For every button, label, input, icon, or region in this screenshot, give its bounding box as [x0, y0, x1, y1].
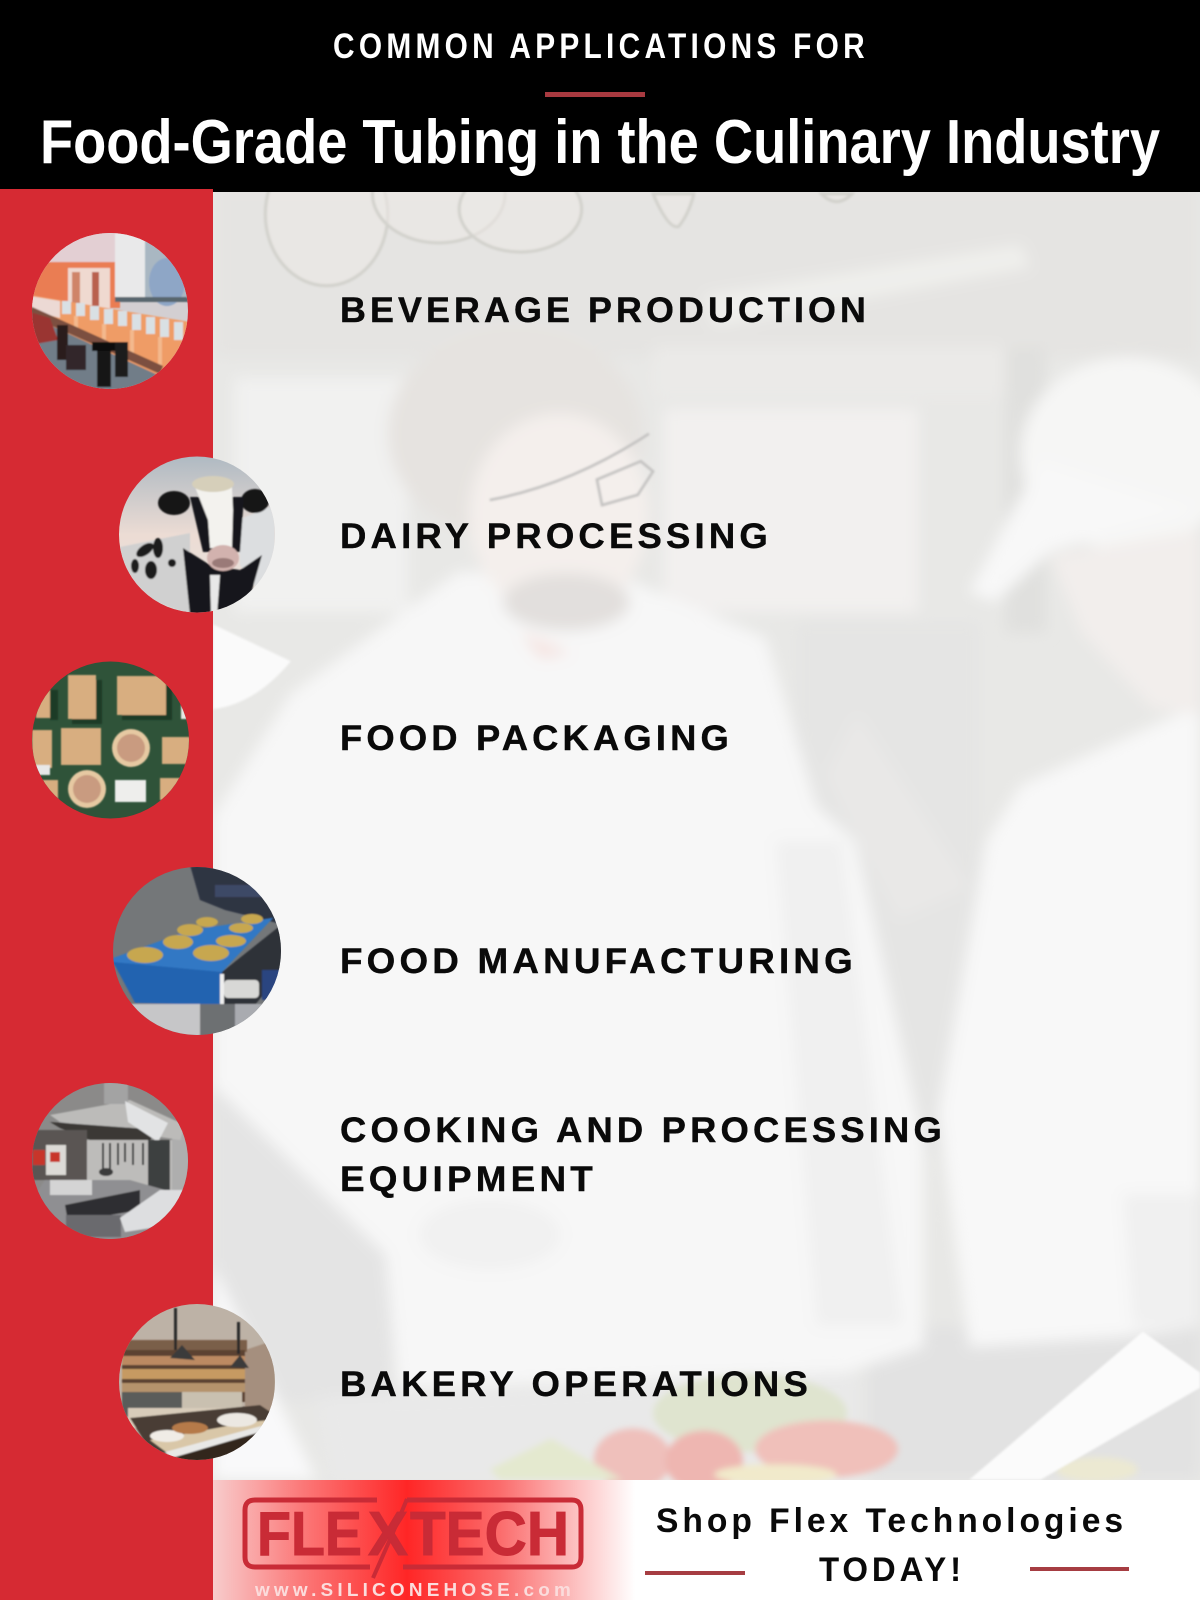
call to action: [656, 1502, 1127, 1589]
icon: dairy cow photo: [117, 455, 277, 615]
header divider: [545, 92, 645, 97]
label: food packaging: FOOD PACKAGING: [340, 719, 733, 758]
label: cooking and processing equipment: COOKING AND PROCESSING: [340, 1111, 946, 1150]
knife and board: [969, 1332, 1200, 1480]
icon: food manufacturing conveyor photo: [110, 865, 285, 1044]
vegetables: [490, 1374, 1138, 1492]
hanging glassware: [264, 192, 854, 288]
logo: Flextech: [245, 1499, 581, 1600]
subtitle: COMMON APPLICATIONS FOR: [333, 27, 869, 66]
icon: commercial kitchen equipment photo: [30, 1080, 192, 1240]
man's hand: [418, 1199, 561, 1270]
glasses: [490, 434, 653, 505]
label: food manufacturing: FOOD MANUFACTURING: [340, 942, 857, 981]
logo website: www.SILICONEHOSE.com: [254, 1580, 575, 1600]
label: cooking and processing equipment: [340, 1111, 946, 1199]
footer divider left: [645, 1571, 745, 1575]
right chef coat: [939, 704, 1200, 1347]
right chef face: [1063, 542, 1194, 706]
logo: Flextech: X: [368, 1500, 408, 1569]
panel: footer: [213, 1480, 1200, 1600]
icon: beverage bottling line photo: [30, 230, 190, 395]
man's hair and face: [389, 386, 414, 481]
logo: Flextech: FLE: [257, 1500, 362, 1569]
label: dairy processing: DAIRY PROCESSING: [340, 517, 772, 556]
left sleeve tip: [213, 624, 291, 709]
panel: red left sidebar: [0, 189, 213, 1600]
footer divider right: [1030, 1567, 1129, 1571]
label: cooking and processing equipment: EQUIPMENT: [340, 1160, 597, 1199]
call to action: TODAY!: [819, 1551, 965, 1589]
panel: chefs kitchen background photo: [213, 143, 1200, 1492]
chef coat: [213, 571, 923, 1388]
icon: food packaging photo: [30, 660, 192, 822]
icon: bakery display photo: [117, 1302, 277, 1462]
call to action: Shop Flex Technologies: [656, 1502, 1127, 1540]
right chef cap: [1020, 357, 1200, 551]
panel: header band: [0, 0, 1200, 192]
logo: Flextech: TECH: [410, 1500, 569, 1569]
label: bakery operations: BAKERY OPERATIONS: [340, 1365, 812, 1404]
label: beverage production: BEVERAGE PRODUCTION: [340, 291, 870, 330]
